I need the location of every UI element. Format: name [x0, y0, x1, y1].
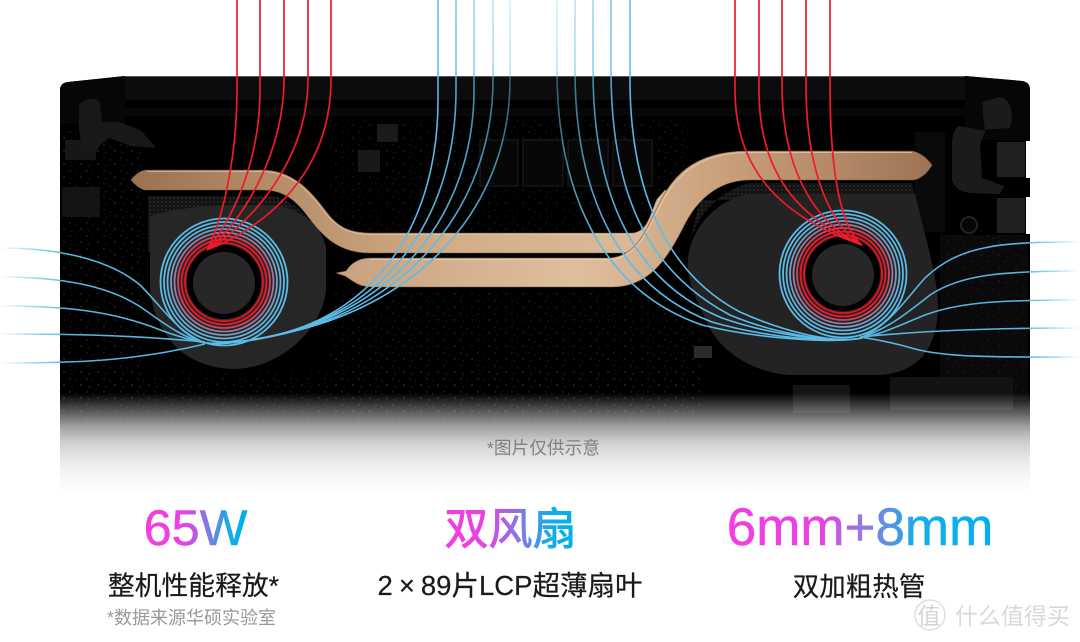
memory chip outlines [480, 140, 652, 186]
stat label: 双加粗热管 [793, 572, 925, 602]
watermark text: 什么值得买 [955, 603, 1070, 629]
left fan hub and rings [160, 218, 288, 346]
laptop body [60, 76, 1030, 500]
stat value 6mm+8mm: 6mm+8mm [727, 498, 993, 557]
heat pipe: left 6mm [131, 170, 668, 253]
watermark badge [915, 600, 945, 630]
left hinge [79, 99, 155, 152]
airflow: hot air left fan [207, 0, 331, 250]
right hinge and ports [915, 97, 1025, 233]
airflow: cool air right intake [860, 242, 1080, 357]
stat value 双风扇: 双风扇 [444, 505, 576, 554]
image disclaimer: *图片仅供示意 [487, 438, 600, 458]
circuit board texture [60, 120, 1028, 422]
airflow: cool air left intake [0, 248, 205, 363]
right fan hub and rings [780, 210, 906, 338]
stat: 65W [107, 499, 280, 628]
airflow: cool air centre left [207, 0, 510, 344]
stat label: 整机性能释放* [108, 571, 280, 601]
airflow: cool air centre right [557, 0, 862, 340]
panel: laptop internals [0, 0, 1080, 501]
heat pipe: right 8mm [336, 151, 932, 287]
watermark [915, 600, 1070, 630]
top edge band [60, 76, 1030, 140]
right fan housing [688, 183, 938, 375]
bottom fade to white [50, 393, 1040, 501]
data source note: *数据来源华硕实验室 [107, 608, 276, 628]
watermark badge: 值 [918, 603, 940, 629]
stat label: 2×89片LCP超薄扇叶 [378, 570, 642, 601]
stat: dual fans [378, 505, 642, 601]
airflow: hot air right fan [735, 0, 862, 245]
stat: heat pipes [727, 498, 993, 602]
left fan housing [148, 196, 326, 369]
stat value 65W: 65W [144, 499, 248, 556]
